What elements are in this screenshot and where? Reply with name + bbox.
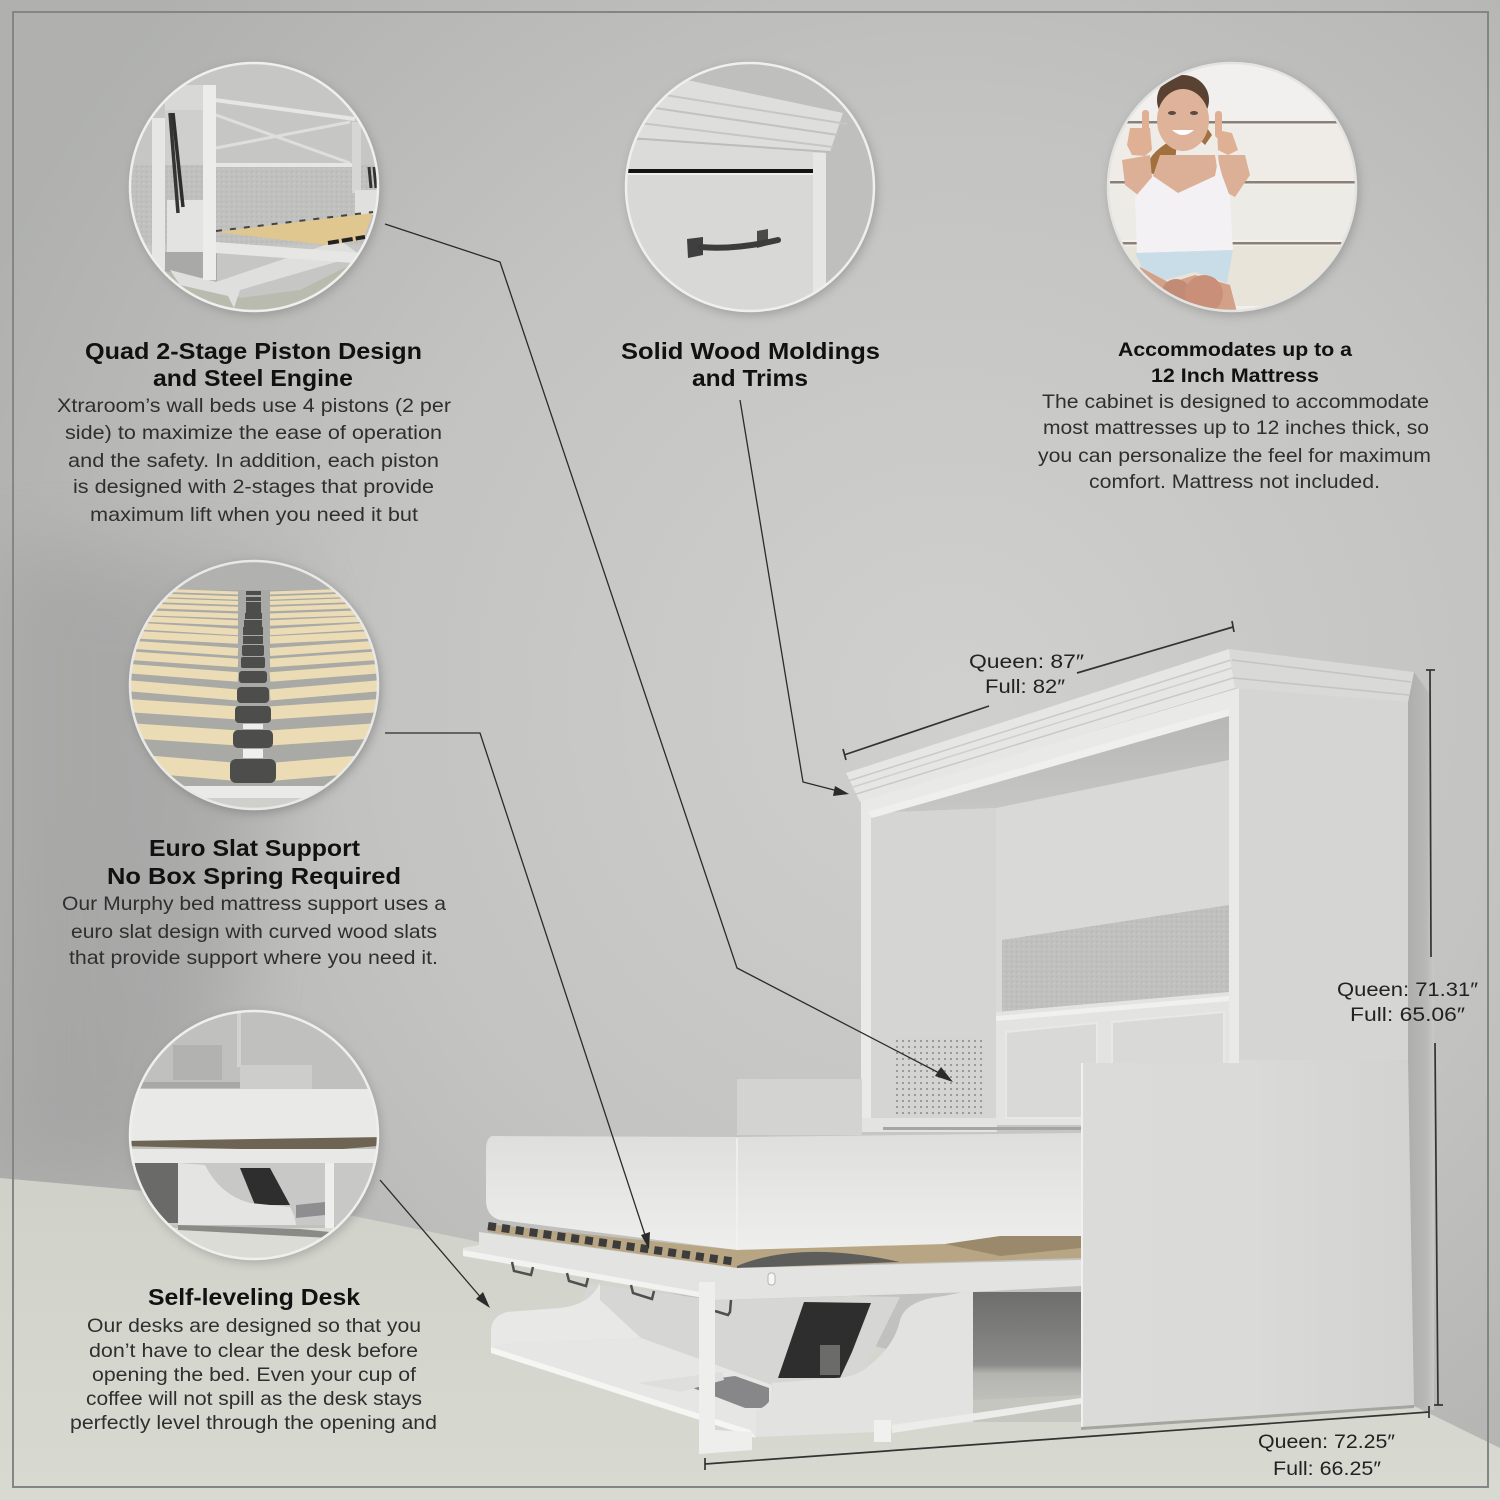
left desk side panel [491,1283,641,1347]
body: mattress: most mattresses up to 12 inches thick, so [1043,417,1429,439]
cabinet side panel [1239,688,1408,1100]
curved wood slats [120,589,388,772]
bed frame rail [463,1232,1081,1300]
right desk side panel [756,1290,973,1437]
label: width dimension [1258,1432,1395,1480]
open space under the bed [973,1292,1081,1422]
text: piston design [57,338,452,526]
body: self-leveling desk: perfectly level through the opening and [70,1412,437,1434]
heading: mattress: 12 Inch Mattress [1151,366,1319,387]
foreground side panel [1081,1060,1414,1427]
crown molding [846,649,1414,802]
body: self-leveling desk: opening the bed. Even your cup of [92,1364,417,1386]
wall bed illustration [463,649,1434,1454]
circle: self-leveling desk photo [120,1000,390,1270]
text: mattress [1038,340,1431,493]
heading: mattress: Accommodates up to a [1118,340,1352,361]
label: height dimension [1337,980,1478,1026]
body: euro slat [62,893,446,969]
body: euro slat: euro slat design with curved wood slats [71,921,437,943]
heading: mattress [1118,340,1352,387]
wood slats under mattress [488,1224,1081,1268]
label: height dimension: Queen: 71.31″ [1337,980,1478,1001]
dark slat holders [230,591,276,783]
body: euro slat: that provide support where you need it. [69,947,438,969]
body: euro slat: Our Murphy bed mattress support uses a [62,893,446,915]
denim shorts [1135,250,1233,283]
dimension: cabinet height [1426,670,1443,1405]
heading: euro slat [107,835,401,889]
label: width dimension: Full: 66.25″ [1273,1459,1381,1480]
body: self-leveling desk: coffee will not spill as the desk stays [86,1388,422,1410]
body: self-leveling desk: don’t have to clear the desk before [89,1340,418,1362]
floor rail [892,1398,1081,1433]
desk shelf [491,1338,772,1437]
mattress [486,1133,1081,1250]
slat hooks [512,1262,731,1315]
body: self-leveling desk [70,1315,437,1434]
heading: self-leveling desk: Self-leveling Desk [148,1284,360,1310]
dimension: bed width [705,1406,1429,1470]
legs and feet [1140,267,1236,310]
text: self-leveling desk [70,1284,437,1434]
label: depth dimension [969,652,1084,698]
heading: euro slat: Euro Slat Support [149,835,360,861]
laptop on the desk [638,1302,871,1408]
heading: solid wood moldings [621,338,880,391]
circle: euro slats photo [120,550,390,820]
circle: woman with mattress photo [1105,62,1362,319]
leader line: euro slats [385,733,650,1249]
heading: piston design [85,338,422,391]
heading: piston design: Quad 2-Stage Piston Design [85,338,422,364]
label: width dimension: Queen: 72.25″ [1258,1432,1395,1453]
body: piston design: Xtraroom’s wall beds use 4 pistons (2 per [57,395,452,417]
cabinet opening [867,708,1229,1125]
perforated side panel [895,1038,983,1118]
right arm and hand [1218,155,1250,197]
body: self-leveling desk: Our desks are designed so that you [87,1315,421,1337]
left arm and hand [1122,155,1152,195]
circle: crown molding and drawer pull photo [624,62,881,319]
circle: piston and steel engine photo [120,50,390,320]
body: piston design: is designed with 2-stages that provide [73,476,434,498]
body: mattress: comfort. Mattress not included. [1089,471,1380,493]
woman figure [1122,75,1250,320]
body: mattress: you can personalize the feel for maximum [1038,445,1431,467]
leader line: piston to bed [385,224,953,1082]
label: depth dimension: Full: 82″ [985,677,1065,698]
body: mattress: The cabinet is designed to accommodate [1042,391,1429,413]
heading: piston design: and Steel Engine [153,365,353,391]
heading: solid wood moldings: and Trims [692,365,808,391]
leader line: moldings [740,400,849,796]
headboard panel [737,1079,862,1135]
dimension: cabinet depth [843,621,1234,760]
white top [1135,160,1233,253]
body: piston design: and the safety. In addition, each piston [68,450,439,472]
leader line: desk [380,1180,490,1308]
label: height dimension: Full: 65.06″ [1350,1005,1465,1026]
desk under-shelf back wall [560,1284,900,1383]
icon: drawer handle [687,229,778,258]
cabinet side shadow strip [1408,672,1434,1410]
body: piston design [57,395,452,526]
lower wall cabinets [996,992,1229,1125]
heading: solid wood moldings: Solid Wood Moldings [621,338,880,364]
body: piston design: side) to maximize the ease of operation [65,422,442,444]
speckled back recess [1002,905,1229,1013]
body: mattress [1038,391,1431,493]
label: depth dimension: Queen: 87″ [969,652,1084,673]
cabinet front frame [861,688,1239,1120]
body: piston design: maximum lift when you need it but [90,504,419,526]
front leg [699,1282,752,1454]
heading: euro slat: No Box Spring Required [107,863,401,889]
text: euro slat [62,835,446,969]
